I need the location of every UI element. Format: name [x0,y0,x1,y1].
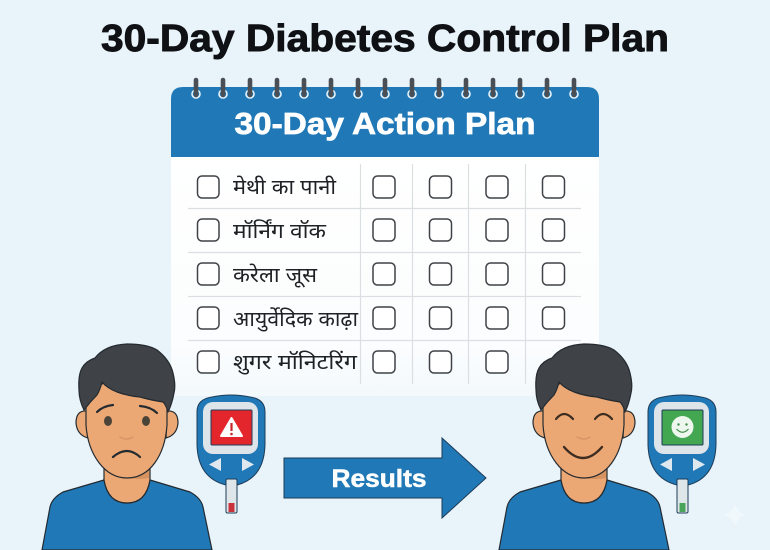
sad face features [97,405,157,457]
results arrow [284,438,486,518]
glucose meter: smiley [648,395,716,513]
green display [662,410,703,445]
meter body [648,395,716,485]
happy person [499,344,669,550]
row: sugar monitoring [198,350,508,375]
hair [536,344,632,412]
neck [104,460,150,503]
title: 30-Day Diabetes Control Plan [101,18,669,60]
test strip [677,479,688,513]
face [543,378,624,478]
row: fenugreek water [198,175,564,199]
row: fenugreek water: मेथी का पानी [233,175,337,199]
face [86,378,167,478]
neck [561,460,607,503]
row: ayurvedic decoction [198,307,564,332]
row: morning walk [198,219,564,243]
shirt [42,480,212,550]
row: bitter gourd juice: करेला जूस [233,263,318,288]
arrow buttons [209,458,221,471]
spiral rings [192,80,578,98]
calendar header band [171,87,599,157]
results arrow: Results [332,465,426,493]
happy face features [556,414,612,458]
row: sugar monitoring: शुगर मॉनिटरिंग [233,350,358,375]
neck shadow [105,466,149,479]
row: bitter gourd juice [198,263,564,288]
calendar heading: 30-Day Action Plan [234,106,536,141]
meter screen [654,402,709,454]
calendar body [171,150,599,396]
panel: calendar action plan [171,80,599,396]
meter body [197,395,265,485]
row: ayurvedic decoction: आयुर्वेदिक काढ़ा [233,307,359,332]
row: morning walk: मॉर्निंग वॉक [233,219,327,243]
sad person [42,344,212,550]
glucose meter: alert [197,395,265,513]
ears [533,411,545,438]
hair [79,344,175,412]
ears [76,411,88,438]
smiley icon [672,416,694,438]
warning icon [221,418,242,436]
meter screen [203,402,258,454]
neck shadow [562,466,606,479]
red display [211,410,252,445]
arrow buttons [660,458,672,471]
shirt [499,480,669,550]
table grid [188,164,581,384]
faint sparkle mark [723,503,747,527]
test strip [226,479,237,513]
